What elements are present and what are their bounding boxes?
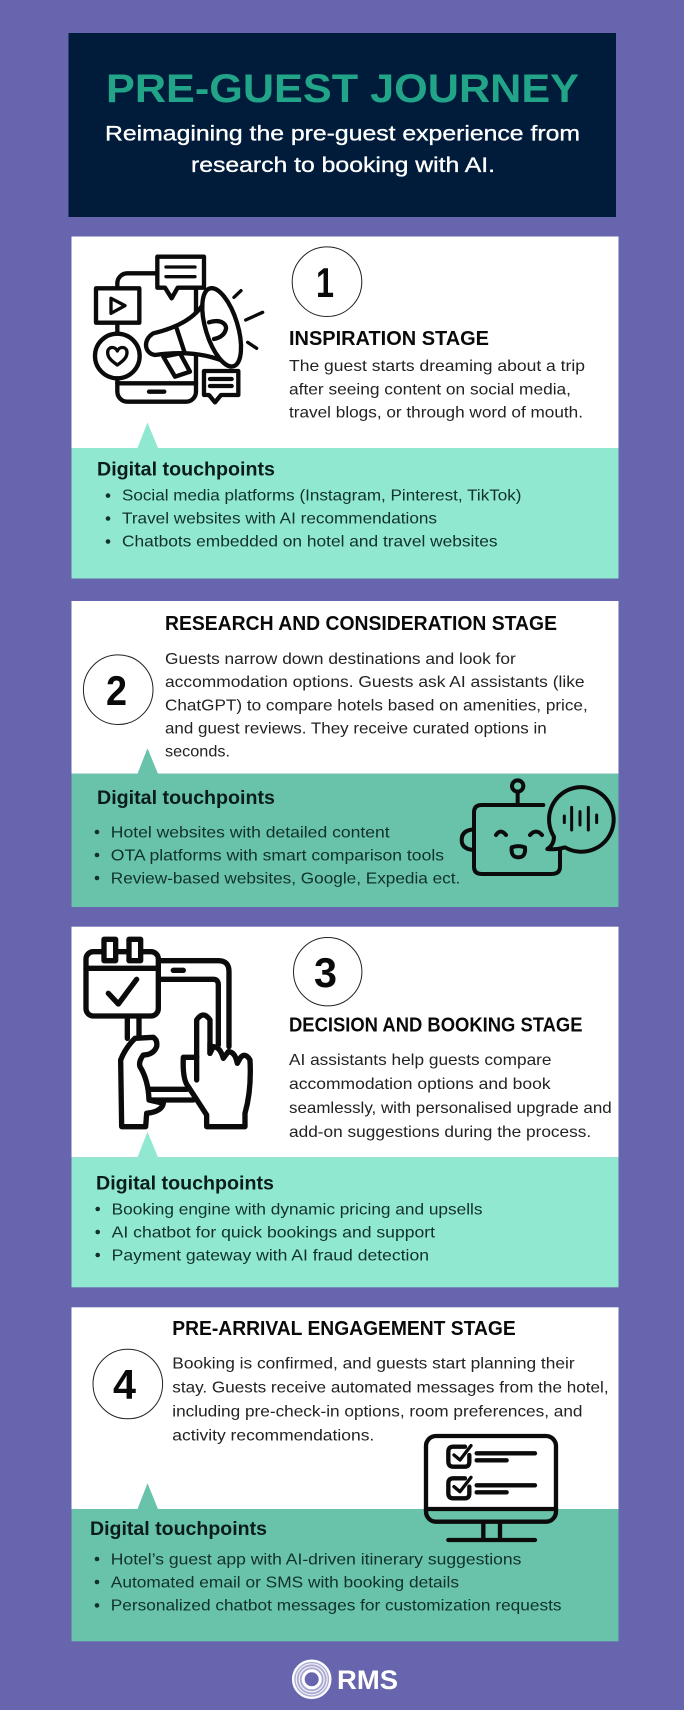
touchpoints strip	[72, 1483, 618, 1641]
panel: pre-arrival engagement stage	[72, 1307, 618, 1641]
touchpoints list	[106, 488, 521, 550]
touchpoints list	[95, 1201, 482, 1264]
description: ChatGPT) to compare hotels based on amenities, price,	[165, 697, 588, 714]
subtitle: Reimagining the pre-guest experience from	[105, 122, 580, 146]
touchpoints strip	[72, 748, 618, 907]
description: accommodation options. Guests ask AI assistants (like	[165, 674, 585, 691]
number badge 2	[83, 655, 153, 724]
touchpoints list: Chatbots embedded on hotel and travel websites	[122, 534, 498, 550]
touchpoints heading: Digital touchpoints	[97, 787, 275, 809]
description: Booking is confirmed, and guests start planning their	[172, 1355, 575, 1372]
icon: phone with megaphone	[95, 257, 263, 402]
panel: decision and booking stage	[72, 927, 618, 1287]
icon: monitor with checklist	[426, 1436, 556, 1540]
number badge 2: 2	[106, 667, 127, 714]
touchpoints list: Review-based websites, Google, Expedia ect.	[111, 870, 460, 887]
description	[172, 1355, 609, 1444]
subtitle: research to booking with AI.	[191, 153, 495, 177]
description: accommodation options and book	[289, 1076, 552, 1093]
description: travel blogs, or through word of mouth.	[289, 404, 583, 422]
heading: DECISION AND BOOKING STAGE	[289, 1015, 582, 1037]
touchpoints list: Social media platforms (Instagram, Pinterest, TikTok)	[122, 488, 522, 505]
description: stay. Guests receive automated messages from the hotel,	[172, 1379, 609, 1396]
number badge 3: 3	[314, 949, 337, 996]
icon: concentric rings	[293, 1661, 330, 1698]
touchpoints list: Hotel’s guest app with AI-driven itinerary suggestions	[111, 1551, 521, 1568]
number badge 4	[93, 1349, 163, 1419]
description: including pre-check-in options, room preferences, and	[172, 1403, 583, 1420]
title: PRE-GUEST JOURNEY	[106, 67, 579, 111]
touchpoints list: Personalized chatbot messages for customization requests	[111, 1598, 562, 1615]
description: and guest reviews. They receive curated options in	[165, 720, 547, 737]
description	[289, 1052, 612, 1141]
touchpoints list	[95, 824, 460, 887]
touchpoints list: Travel websites with AI recommendations	[122, 510, 437, 528]
description: Guests narrow down destinations and look for	[165, 651, 516, 668]
touchpoints list: Booking engine with dynamic pricing and upsells	[112, 1201, 482, 1218]
number badge 4: 4	[113, 1361, 137, 1408]
number badge 1	[292, 247, 362, 316]
touchpoints list: Payment gateway with AI fraud detection	[112, 1247, 429, 1264]
header banner	[68, 33, 616, 217]
touchpoints list	[95, 1551, 561, 1615]
wordmark: RMS	[337, 1665, 398, 1695]
description: The guest starts dreaming about a trip	[289, 358, 585, 375]
description: after seeing content on social media,	[289, 382, 571, 399]
description: add-on suggestions during the process.	[289, 1124, 591, 1141]
heading: RESEARCH AND CONSIDERATION STAGE	[165, 613, 557, 635]
description	[289, 358, 585, 422]
description	[165, 651, 588, 760]
number badge 1: 1	[316, 259, 334, 306]
panel: inspiration stage	[72, 236, 618, 578]
touchpoints list: AI chatbot for quick bookings and support	[112, 1224, 436, 1241]
touchpoints heading: Digital touchpoints	[97, 458, 275, 480]
touchpoints strip	[72, 422, 618, 578]
touchpoints list: OTA platforms with smart comparison tools	[111, 847, 444, 864]
icon: calendar and hand on phone	[86, 939, 250, 1127]
heading: PRE-ARRIVAL ENGAGEMENT STAGE	[172, 1318, 516, 1340]
description: activity recommendations.	[172, 1427, 374, 1444]
logo: RMS	[293, 1661, 398, 1698]
description: AI assistants help guests compare	[289, 1052, 552, 1069]
description: seamlessly, with personalised upgrade and	[289, 1100, 612, 1117]
subtitle	[105, 122, 580, 177]
touchpoints list: Automated email or SMS with booking details	[111, 1574, 459, 1591]
description: seconds.	[165, 743, 230, 760]
number badge 3	[294, 938, 362, 1006]
touchpoints heading: Digital touchpoints	[90, 1518, 267, 1540]
touchpoints list: Hotel websites with detailed content	[111, 824, 390, 841]
heading: INSPIRATION STAGE	[289, 328, 489, 350]
panel: research and consideration stage	[72, 601, 618, 907]
touchpoints heading: Digital touchpoints	[96, 1172, 274, 1194]
touchpoints strip	[72, 1132, 618, 1287]
icon: robot with speech bubble	[462, 780, 614, 874]
